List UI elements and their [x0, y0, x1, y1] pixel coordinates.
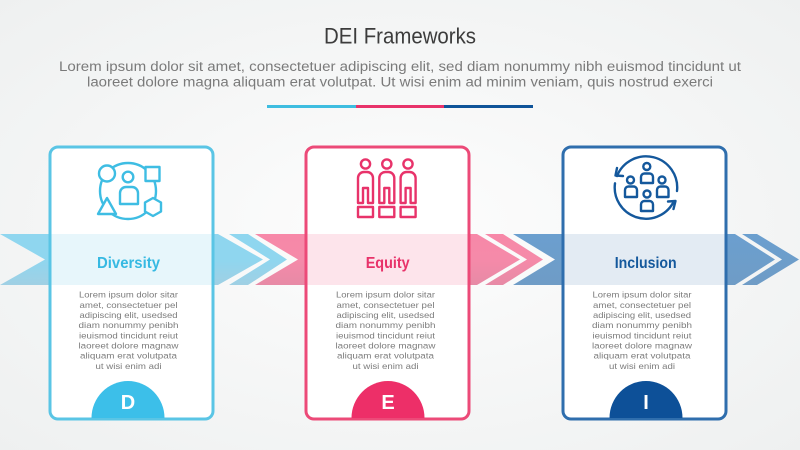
panel: inclusion [563, 147, 726, 419]
badge: I: I [643, 392, 649, 414]
card border [50, 147, 213, 419]
body text: adipiscing elit, usedsed [336, 310, 435, 320]
subtitle text [59, 59, 741, 90]
label: equity: Equity [366, 255, 410, 272]
body text: amet, consectetuer pel [80, 300, 178, 310]
body text: amet, consectetuer pel [593, 300, 691, 310]
icon: diverse shapes around person [98, 163, 161, 219]
card frame [563, 147, 726, 419]
body text: Lorem ipsum dolor sitar [79, 290, 178, 300]
label band [306, 234, 469, 285]
body text: aliquam erat volutpata [337, 351, 434, 361]
badge: I [610, 381, 682, 418]
body text: aliquam erat volutpata [80, 351, 177, 361]
panel: diversity [50, 147, 213, 419]
icon: people in a circular cycle [615, 156, 677, 219]
body text [592, 290, 693, 371]
body text: diam nonummy penibh [78, 320, 179, 330]
arrow: diversity [0, 234, 287, 285]
body text: ieuismod tincidunt reiut [79, 330, 179, 340]
body text: diam nonummy penibh [336, 320, 436, 330]
body text: ieuismod tincidunt reiut [592, 330, 692, 340]
body text: ut wisi enim adi [609, 361, 675, 371]
card frame [50, 147, 213, 419]
body text: laoreet dolore magnaw [78, 341, 179, 351]
label band [563, 234, 726, 285]
body text: Lorem ipsum dolor sitar [592, 290, 692, 300]
label band [50, 234, 213, 285]
arrow: inclusion [513, 234, 799, 285]
card border [306, 147, 469, 419]
label: diversity: Diversity [97, 255, 160, 272]
subtitle text: laoreet dolore magna aliquam erat volutpat. Ut wisi enim ad minim veniam, quis nostrud exerci [87, 74, 713, 90]
badge: D [92, 381, 164, 418]
body text: aliquam erat volutpata [594, 351, 691, 361]
label: inclusion: Inclusion [615, 255, 677, 272]
body text: ut wisi enim adi [96, 361, 162, 371]
badge: E [352, 381, 424, 418]
body text [78, 290, 179, 371]
body text: diam nonummy penibh [592, 320, 692, 330]
body text: adipiscing elit, usedsed [593, 310, 691, 320]
card border [563, 147, 726, 419]
body text: Lorem ipsum dolor sitar [336, 290, 435, 300]
body text: amet, consectetuer pel [336, 300, 435, 310]
icon: three equal people on blocks [358, 159, 416, 217]
body text: ieuismod tincidunt reiut [336, 330, 436, 340]
body text [336, 290, 436, 371]
tricolor divider [267, 105, 533, 108]
panel: equity [306, 147, 469, 419]
card frame [306, 147, 469, 419]
body text: ut wisi enim adi [352, 361, 419, 371]
subtitle text: Lorem ipsum dolor sit amet, consectetuer adipiscing elit, sed diam nonummy nibh euismod tincidunt ut [59, 59, 741, 74]
body text: laoreet dolore magnaw [592, 341, 693, 351]
body text: laoreet dolore magnaw [336, 341, 436, 351]
arrow: equity [255, 234, 543, 285]
badge: E: E [381, 392, 395, 414]
body text: adipiscing elit, usedsed [80, 310, 178, 320]
title: DEI Frameworks [324, 24, 476, 48]
badge: D: D [121, 392, 135, 414]
